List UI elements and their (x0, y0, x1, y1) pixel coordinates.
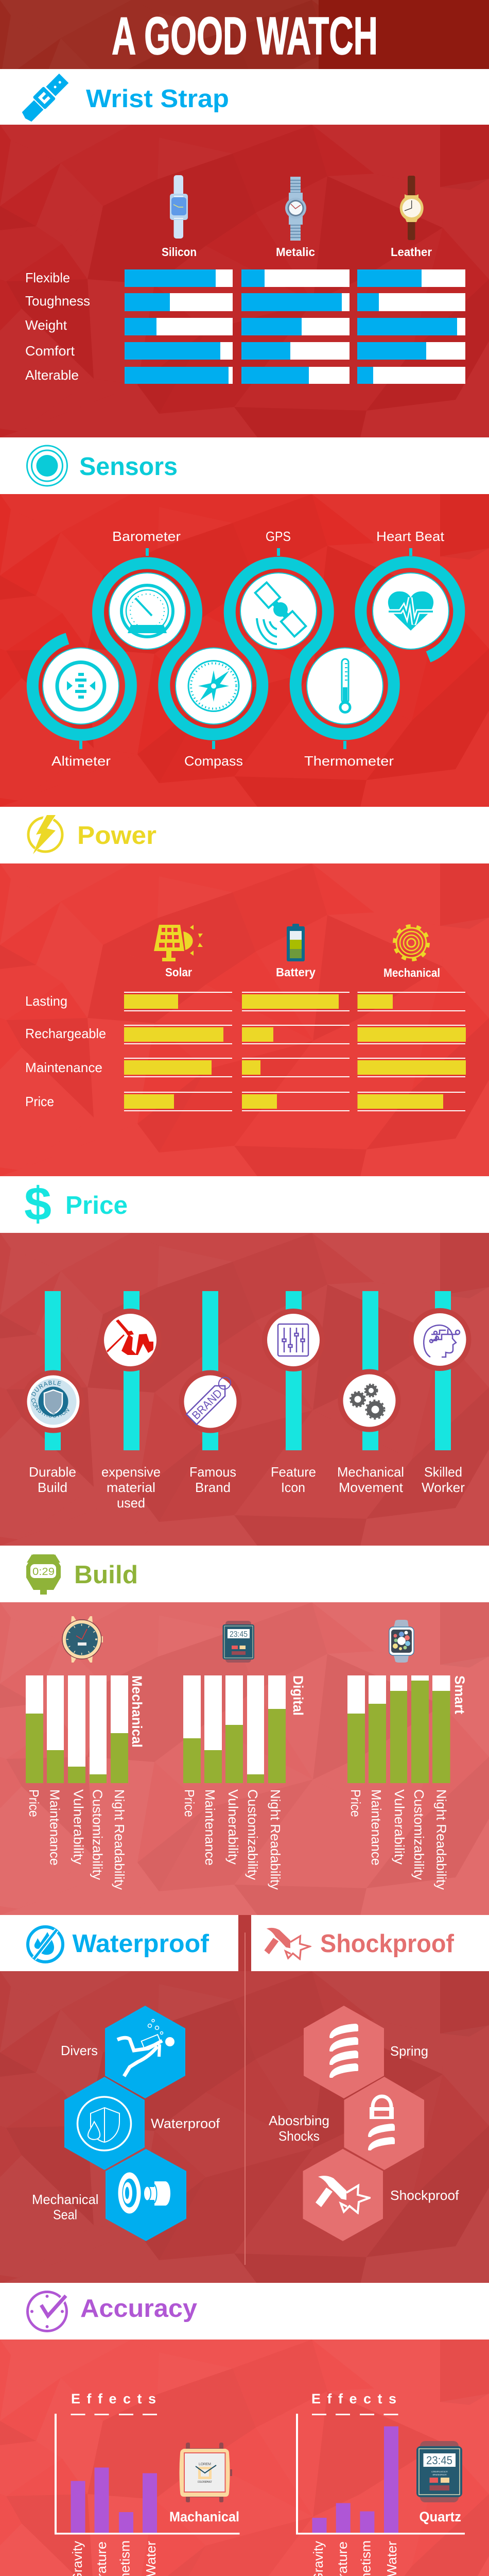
icon: workers (107, 1319, 153, 1355)
axis labels: mechanical: Customizability (90, 1789, 105, 1880)
row labels: Weight (25, 317, 67, 333)
heading: build (0, 1546, 489, 1602)
heading: sensors (0, 437, 489, 494)
icon: barometer (121, 585, 173, 637)
axis labels: digital: Price (182, 1789, 197, 1817)
bars: smart (347, 1675, 450, 1783)
axis labels: smart: Price (348, 1789, 363, 1817)
rotated labels (310, 2540, 399, 2576)
hexagon: waterproof (64, 2077, 145, 2170)
chart: mechanical (55, 2391, 240, 2576)
watch: quartz: SIT AMET EXTANDOR (432, 2473, 447, 2476)
hexagon: spring (304, 2006, 384, 2098)
watch: machanical: LOREM (199, 2463, 211, 2466)
labels: material (107, 1480, 155, 1495)
icon: brand tag (186, 1375, 236, 1425)
icon: solar (154, 925, 203, 961)
axis labels: mechanical: Price (26, 1789, 42, 1817)
panel: accuracy (0, 2340, 489, 2576)
watch: machanical: DOLOR SIT AMET (198, 2481, 212, 2484)
hexagon labels right (269, 2043, 459, 2203)
watch: machanical (179, 2443, 232, 2502)
labels (29, 1464, 465, 1511)
teal sliders (45, 1291, 451, 1450)
column labels: Solar (165, 965, 192, 979)
panel: price (0, 1233, 489, 1546)
rotated labels (69, 2540, 159, 2576)
panel: sensors (0, 494, 489, 807)
row labels: Lasting (25, 993, 67, 1009)
icon: stopwatch: 0:29 (32, 1566, 55, 1578)
axis labels: smart: Night Readability (433, 1789, 449, 1890)
icon: stopwatch (26, 1554, 61, 1595)
watch: quartz (416, 2441, 462, 2502)
watch: digital (222, 1621, 254, 1663)
icon: hammer (264, 1928, 310, 1959)
labels: Movement (339, 1480, 404, 1495)
sensor labels: Compass (184, 753, 243, 769)
axis labels: smart: Maintenance (369, 1789, 384, 1866)
slider knobs (22, 1308, 471, 1433)
sensor labels: Barometer (112, 529, 181, 544)
labels: Famous (189, 1464, 236, 1480)
icon: skilled head (424, 1325, 460, 1357)
icon: power (28, 813, 62, 855)
watch: leather (400, 176, 424, 240)
label: Quartz (419, 2509, 461, 2524)
serpentine ribbon (32, 548, 459, 749)
sensor labels: Heart Beat (376, 529, 445, 544)
row labels (25, 270, 90, 383)
watch: smart (389, 1620, 414, 1663)
labels: Worker (422, 1480, 465, 1495)
axis labels: digital: Vulnerability (225, 1789, 241, 1865)
icon: altimeter (57, 663, 104, 710)
white discs (43, 573, 449, 724)
heading text: Shockproof (320, 1930, 455, 1958)
watch: silicon (170, 175, 188, 239)
effects title: Effects (311, 2391, 396, 2406)
icon: dollar: $ (24, 1178, 51, 1230)
icon: durable construction: DURABLE (31, 1381, 62, 1396)
axis labels: smart (348, 1789, 449, 1890)
labels: used (117, 1495, 145, 1511)
label: Metalic (276, 245, 315, 259)
bars: digital (183, 1675, 286, 1783)
labels: Brand (195, 1480, 231, 1495)
hexagon labels right: Abosrbing (269, 2113, 329, 2128)
hexagon labels left: Seal (53, 2207, 77, 2223)
watch: quartz: 23:45 (426, 2454, 452, 2467)
sensor labels: Altimeter (51, 753, 111, 769)
row labels (25, 993, 106, 1109)
group titles: Mechanical (129, 1675, 145, 1748)
bars: mechanical (26, 1675, 128, 1783)
icon: battery (287, 924, 305, 961)
icon: brand tag: BRAND (189, 1386, 224, 1422)
labels: Feature (271, 1464, 316, 1480)
axis labels: smart: Customizability (411, 1789, 427, 1880)
axis labels: mechanical: Night Readability (112, 1789, 127, 1890)
labels: Icon (281, 1480, 305, 1495)
icon: gears (350, 1384, 385, 1419)
icon: wrist strap (19, 72, 70, 124)
watch: digital: 23:45 (230, 1630, 248, 1639)
heading: accuracy (0, 2283, 489, 2340)
icon: clock check (28, 2292, 67, 2331)
heading: price (0, 1176, 489, 1233)
effects title: Effects (71, 2391, 156, 2406)
row labels: Toughness (25, 293, 90, 309)
row labels: Alterable (25, 367, 79, 383)
icon: no water (28, 1927, 63, 1962)
sensor labels: GPS (266, 529, 291, 544)
heading text: Power (77, 822, 156, 850)
rotated labels: Water (143, 2541, 159, 2576)
labels: Skilled (424, 1464, 462, 1480)
column labels: Battery (276, 965, 316, 979)
axis labels: smart: Vulnerability (392, 1789, 407, 1865)
icon: sensors (27, 446, 67, 486)
heading: waterproof and shockproof (0, 1915, 489, 1971)
group titles: Digital (290, 1675, 306, 1716)
axis labels: mechanical: Vulnerability (71, 1789, 86, 1865)
hexagon: shockproof (303, 2149, 383, 2241)
sensor labels (51, 529, 445, 769)
labels: Build (38, 1480, 67, 1495)
heading text: Waterproof (72, 1930, 209, 1958)
hexagon labels left: Divers (61, 2043, 98, 2058)
watch: mechanical (62, 1616, 103, 1663)
heading text: Wrist Strap (86, 85, 229, 113)
sensor labels: Thermometer (304, 753, 394, 769)
heading text: Build (74, 1561, 138, 1589)
panel: wrist strap (0, 125, 489, 437)
hexagon labels right: Shocks (278, 2128, 320, 2144)
hexagon: absorbing shocks (344, 2077, 424, 2170)
watch: metalic (285, 177, 306, 241)
labels: Durable (29, 1464, 76, 1480)
heading: power (0, 807, 489, 863)
bar chart: strap (125, 269, 465, 384)
axis labels: mechanical (26, 1789, 127, 1890)
panel: waterproof and shockproof (0, 1933, 489, 2284)
icon: satellite (255, 583, 306, 644)
watch: quartz: LOREM IPSUM DOLOR (431, 2470, 448, 2473)
hexagon: divers (105, 2006, 185, 2098)
labels: Mechanical (337, 1464, 404, 1480)
chart: quartz (296, 2391, 465, 2576)
label: Leather (391, 245, 432, 259)
axis labels: digital: Customizability (245, 1789, 260, 1880)
row labels: Flexible (25, 270, 70, 285)
axis labels: digital: Night Readability (268, 1789, 283, 1890)
label: Silicon (162, 245, 197, 259)
row labels: Rechargeable (25, 1026, 106, 1041)
icon: heart beat (388, 591, 433, 631)
header band (0, 0, 489, 313)
axis labels: digital: Maintenance (202, 1789, 218, 1866)
hexagon labels left: Waterproof (151, 2115, 220, 2131)
axis labels: digital (182, 1789, 283, 1890)
axis labels: mechanical: Maintenance (47, 1789, 63, 1866)
icon: gear (394, 926, 428, 960)
panel: power (0, 863, 489, 1176)
group titles: Smart (452, 1675, 467, 1714)
hexagon labels right: Spring (390, 2043, 428, 2059)
heading text: Accuracy (80, 2295, 197, 2323)
group titles (129, 1675, 467, 1748)
row labels: Price (25, 1094, 54, 1109)
bar chart: power (124, 992, 466, 1111)
labels: expensive (101, 1464, 161, 1480)
hexagon labels left: Mechanical (32, 2192, 99, 2207)
icon: feature sliders (278, 1324, 308, 1356)
heading text: Sensors (79, 453, 178, 481)
hexagon labels right: Shockproof (390, 2188, 459, 2203)
hexagon labels left (32, 2043, 220, 2223)
row labels: Maintenance (25, 1060, 102, 1075)
rotated labels: Water (384, 2541, 399, 2576)
label: Machanical (169, 2509, 239, 2524)
icon: durable construction: CONSTRUCTION (31, 1398, 69, 1418)
heading text: Price (65, 1192, 128, 1219)
icon: compass (188, 660, 239, 711)
icon: thermometer (339, 659, 351, 714)
row labels: Comfort (25, 343, 75, 359)
heading: wrist strap (0, 69, 489, 125)
column labels (165, 965, 440, 979)
column labels: Mechanical (383, 966, 440, 979)
icon: durable construction (30, 1379, 76, 1425)
hexagon: mechanical seal (106, 2149, 186, 2241)
panel: build (0, 1602, 489, 1915)
